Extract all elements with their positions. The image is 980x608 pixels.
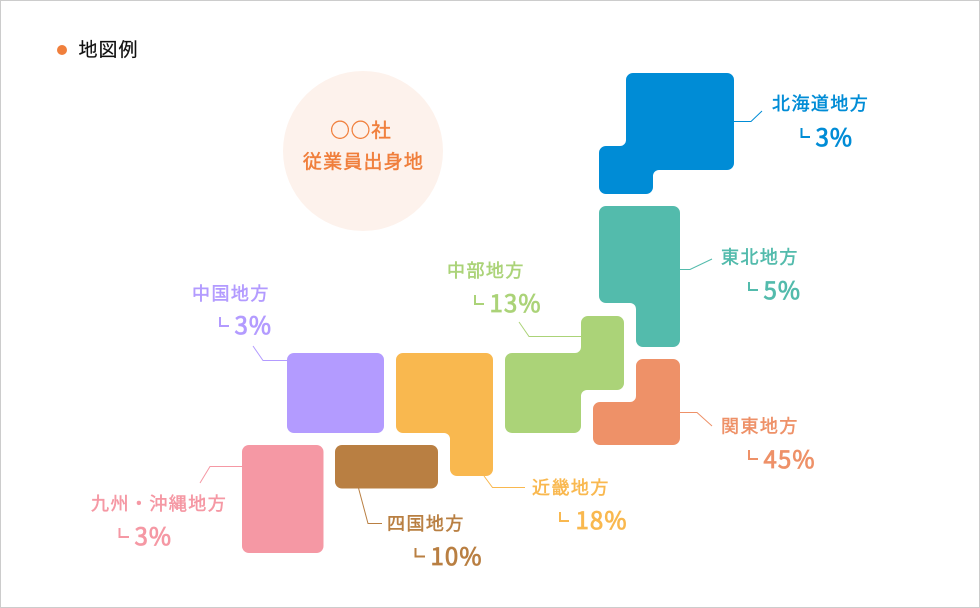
- region: Shikoku: 10%: [430, 537, 483, 572]
- region: Kanto: 関東地方: [721, 412, 799, 438]
- region: Hokkaido: 北海道地方: [772, 90, 869, 116]
- region: Shikoku: 四国地方: [387, 510, 465, 536]
- region: Kyushu and Okinawa: 3%: [134, 517, 172, 552]
- region: Chubu: 13%: [490, 284, 542, 319]
- title badge: [283, 71, 443, 231]
- title badge: ○○社: [330, 114, 392, 143]
- region: Hokkaido: [599, 73, 869, 194]
- region: Hokkaido: 3%: [816, 118, 853, 153]
- region: Tohoku: [599, 206, 801, 347]
- region: Kanto: [593, 359, 816, 475]
- region: Shikoku: [335, 445, 483, 572]
- region: Tohoku: 東北地方: [721, 244, 799, 270]
- region: Chubu: [447, 257, 624, 433]
- region: Kinki: [396, 353, 628, 536]
- region: Kanto: 45%: [764, 440, 816, 475]
- region: Chugoku: [192, 280, 384, 433]
- region: Kinki: 近畿地方: [532, 474, 610, 500]
- legend heading: 地図例: [78, 35, 139, 62]
- region: Kinki: 18%: [576, 501, 628, 536]
- region: Tohoku: 5%: [764, 271, 801, 306]
- region: Chubu: 中部地方: [447, 257, 525, 283]
- region: Chugoku: 3%: [234, 306, 272, 341]
- region: Chugoku: 中国地方: [192, 280, 270, 306]
- region: Kyushu and Okinawa: [91, 445, 324, 553]
- title badge: 従業員出身地: [303, 147, 424, 174]
- region: Kyushu and Okinawa: 九州・沖縄地方: [91, 490, 227, 516]
